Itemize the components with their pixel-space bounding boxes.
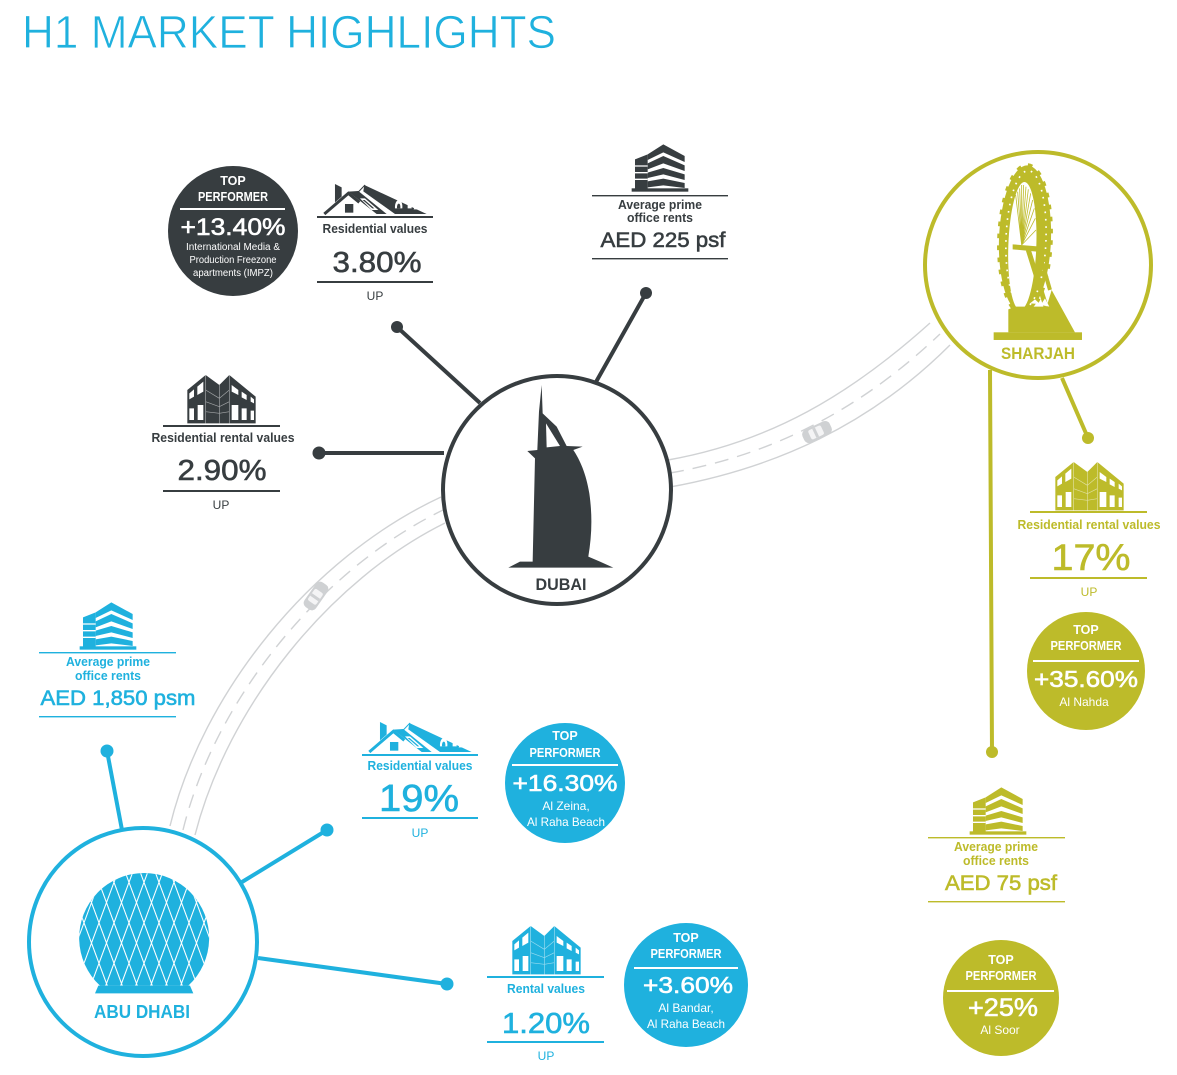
stat: Dubai residential rental values: [152, 375, 294, 512]
stat: Sharjah average prime office rents: AED 75 psf: [945, 871, 1057, 895]
callout: Sharjah office top performer: +25%: [968, 994, 1038, 1022]
callout: Abu Dhabi residential top performer: TOP: [552, 729, 578, 743]
callout: Dubai top performer: apartments (IMPZ): [193, 268, 273, 279]
stat: Abu Dhabi average prime office rents: office rents: [75, 669, 141, 683]
road: Dubai to Sharjah: [668, 323, 950, 487]
icon: residential building: [512, 926, 581, 974]
label: Sharjah: SHARJAH: [1001, 344, 1075, 363]
icon: house: [324, 184, 427, 214]
stat: Sharjah average prime office rents: Average prime: [954, 840, 1038, 854]
road: Abu Dhabi to Dubai: [170, 497, 445, 835]
icon: office building: [80, 602, 136, 650]
stat: Dubai residential rental values: 2.90%: [178, 455, 266, 487]
stat: Sharjah residential rental values: UP: [1081, 585, 1097, 599]
stat: Dubai residential rental values: Residential rental values: [152, 430, 294, 445]
callout: Sharjah rental top performer: Al Nahda: [1059, 695, 1109, 709]
callout: Abu Dhabi rental top performer: PERFORMER: [650, 947, 722, 961]
callout: Abu Dhabi residential top performer: Al Zeina,: [542, 799, 590, 813]
callout: Abu Dhabi residential top performer: Al Raha Beach: [527, 815, 605, 829]
stat: Dubai average prime office rents: AED 225 psf: [600, 228, 726, 252]
callout: Dubai top performer: Production Freezone: [190, 255, 277, 266]
stat: Sharjah average prime office rents: office rents: [963, 854, 1029, 868]
stat: Sharjah residential rental values: 17%: [1052, 537, 1130, 578]
stat: Abu Dhabi average prime office rents: AED 1,850 psm: [40, 686, 196, 710]
icon: residential building: [187, 375, 256, 423]
panel: Dubai hub: [443, 376, 671, 604]
callout: Abu Dhabi residential top performer: [505, 723, 625, 843]
stat: Dubai residential rental values: UP: [213, 498, 229, 512]
callout: Sharjah rental top performer: [1027, 612, 1145, 730]
stat: Dubai residential values: [317, 184, 433, 303]
callout: Sharjah office top performer: TOP: [988, 953, 1014, 967]
stat: Dubai residential values: 3.80%: [332, 247, 422, 279]
title: H1 MARKET HIGHLIGHTS: [22, 6, 556, 58]
callout: Abu Dhabi residential top performer: PERFORMER: [530, 746, 600, 760]
label: Abu Dhabi: ABU DHABI: [94, 1002, 190, 1022]
stat: Sharjah average prime office rents: [928, 787, 1065, 902]
callout: Sharjah rental top performer: TOP: [1073, 623, 1099, 637]
icon: residential building: [1055, 462, 1124, 510]
stat: Dubai average prime office rents: office rents: [627, 211, 693, 225]
callout: Dubai top performer: PERFORMER: [198, 190, 268, 204]
icon: Aldar HQ building: [79, 873, 210, 994]
stat: Abu Dhabi residential values: 19%: [379, 778, 459, 820]
connectors: Dubai: [312, 287, 652, 460]
icon: office building: [970, 787, 1026, 835]
callout: Sharjah office top performer: Al Soor: [980, 1023, 1020, 1037]
callout: Dubai top performer: TOP: [220, 174, 246, 188]
stat: Dubai residential values: UP: [367, 289, 383, 303]
callout: Abu Dhabi rental top performer: Al Bandar,: [658, 1001, 714, 1015]
callout: Abu Dhabi rental top performer: [624, 923, 748, 1047]
stat: Abu Dhabi residential values: Residential values: [368, 758, 472, 773]
icon: Eye of the Emirates wheel: [994, 164, 1082, 340]
stat: Abu Dhabi residential values: [362, 722, 478, 840]
label: Dubai: DUBAI: [536, 575, 586, 594]
stat: Abu Dhabi rental values: Rental values: [507, 981, 585, 996]
callout: Sharjah rental top performer: +35.60%: [1034, 666, 1138, 692]
stat: Abu Dhabi rental values: 1.20%: [502, 1008, 590, 1040]
stat: Abu Dhabi residential values: UP: [412, 826, 428, 840]
callout: Abu Dhabi residential top performer: +16.30%: [512, 770, 618, 796]
stat: Sharjah residential rental values: Residential rental values: [1018, 517, 1160, 532]
callout: Dubai top performer: [168, 166, 298, 296]
callout: Dubai top performer: +13.40%: [180, 214, 286, 241]
connectors: Abu Dhabi: [100, 744, 454, 990]
stat: Abu Dhabi average prime office rents: Average prime: [66, 655, 150, 669]
callout: Dubai top performer: International Media &: [186, 242, 280, 253]
stat: Abu Dhabi average prime office rents: [39, 602, 196, 717]
callout: Sharjah office top performer: PERFORMER: [966, 969, 1036, 983]
panel: Abu Dhabi hub: [29, 828, 257, 1056]
callout: Abu Dhabi rental top performer: +3.60%: [643, 972, 733, 998]
stat: Abu Dhabi rental values: [487, 926, 604, 1063]
callout: Sharjah rental top performer: PERFORMER: [1050, 639, 1122, 653]
stat: Dubai residential values: Residential values: [322, 221, 428, 236]
stat: Dubai average prime office rents: Average prime: [618, 198, 702, 212]
stat: Dubai average prime office rents: [592, 144, 728, 259]
panel: Sharjah hub: [925, 152, 1151, 378]
callout: Abu Dhabi rental top performer: TOP: [673, 931, 699, 945]
icon: house: [369, 722, 472, 752]
callout: Abu Dhabi rental top performer: Al Raha Beach: [647, 1017, 725, 1031]
icon: office building: [632, 144, 688, 192]
callout: Sharjah office top performer: [943, 940, 1059, 1056]
stat: Abu Dhabi rental values: UP: [538, 1049, 554, 1063]
stat: Sharjah residential rental values: [1018, 462, 1160, 599]
connectors: Sharjah: [986, 370, 1094, 758]
icon: Burj Al Arab: [508, 385, 613, 568]
